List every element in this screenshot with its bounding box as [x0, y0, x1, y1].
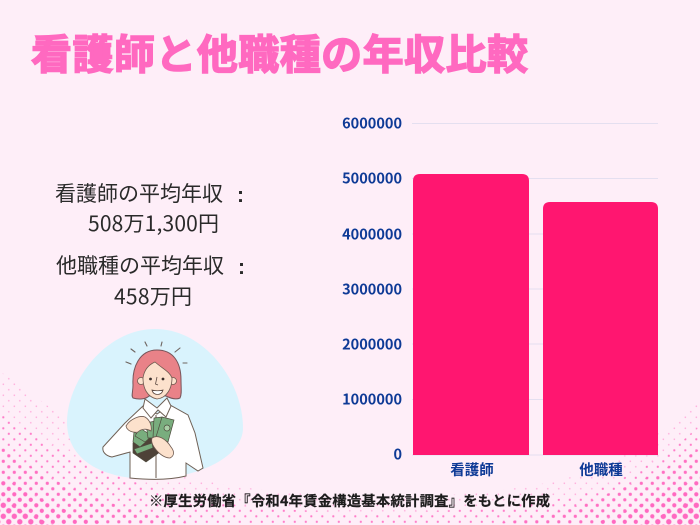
illustration: woman holding cash — [67, 329, 243, 479]
bar chart — [342, 112, 658, 480]
text block: nurse average income: 看護師の平均年収 — [55, 178, 223, 208]
y axis labels: 6000000 — [342, 112, 402, 134]
icon: surprise lines — [126, 342, 187, 364]
y axis labels: 4000000 — [342, 224, 402, 244]
bar: nurses — [413, 174, 529, 455]
icon: hands — [126, 416, 174, 458]
icon: shirt placket — [155, 415, 157, 478]
x axis labels: 他職種 — [579, 459, 623, 480]
icon: ears — [138, 378, 176, 384]
icon: shirt — [103, 405, 203, 479]
icon: eyes, nose and smile — [149, 377, 164, 394]
icon: collar — [143, 398, 171, 418]
grid lines — [412, 124, 658, 455]
bar: other occupations — [543, 202, 658, 455]
y axis labels: 5000000 — [342, 168, 402, 188]
title: 看護師と他職種の年収比較 — [31, 21, 528, 81]
icon: face — [143, 362, 172, 399]
text block: nurse average income: : — [237, 184, 244, 207]
y axis labels: 0 — [393, 444, 402, 464]
halftone dot background — [0, 372, 700, 525]
source footnote: ※厚生労働省『令和4年賃金構造基本統計調査』をもとに作成 — [149, 490, 550, 511]
y axis labels — [342, 112, 402, 464]
y axis labels: 2000000 — [342, 334, 402, 354]
text block: other occupations average income: 458万円 — [114, 281, 192, 311]
text block: other occupations average income — [56, 250, 245, 311]
icon: hair — [132, 350, 181, 399]
text block: nurse average income: 508万1,300円 — [88, 208, 219, 238]
text block: other occupations average income: 他職種の平均年収 — [56, 250, 224, 280]
y axis labels: 1000000 — [342, 388, 402, 410]
icon: dollar notes — [133, 417, 174, 462]
y axis labels: 3000000 — [342, 278, 402, 300]
text block: nurse average income — [55, 178, 244, 238]
x axis labels — [450, 459, 623, 480]
x axis labels: 看護師 — [450, 459, 494, 480]
text block: other occupations average income: : — [238, 256, 245, 279]
icon: light blue blob — [67, 329, 243, 479]
